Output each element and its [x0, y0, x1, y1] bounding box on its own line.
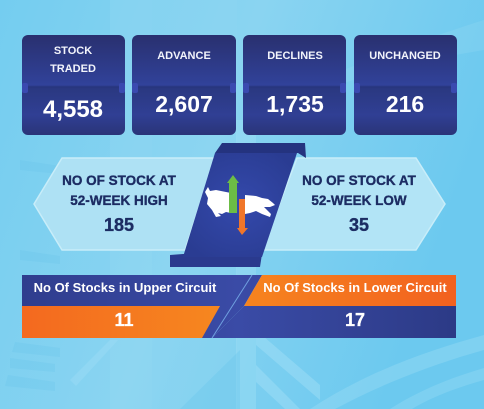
- card: declines: [243, 35, 346, 135]
- card: advance: 2,607: [155, 91, 213, 117]
- icon: green up arrow: [227, 175, 239, 213]
- icon: orange down arrow: [237, 199, 248, 235]
- panel: 52-week high: 52-WEEK HIGH: [70, 193, 168, 208]
- panel: 52-week low: [262, 158, 445, 250]
- panel: 52-week high: 185: [104, 215, 134, 235]
- panel: 52-week high: [34, 158, 215, 250]
- card: stock traded: [22, 35, 125, 135]
- panel: 52-week high: NO OF STOCK AT: [62, 173, 177, 188]
- panel: upper circuit: 11: [114, 310, 134, 330]
- panel: lower circuit: 17: [345, 310, 365, 330]
- icon: bear: [245, 195, 275, 217]
- card: declines: 1,735: [266, 91, 324, 117]
- card: unchanged: [354, 35, 457, 135]
- panel: 52-week low: NO OF STOCK AT: [302, 173, 417, 188]
- card: unchanged: 216: [386, 91, 424, 117]
- ribbon: [170, 143, 306, 267]
- card: unchanged: UNCHANGED: [369, 50, 441, 62]
- panel: 52-week low: 35: [349, 215, 369, 235]
- panel: lower circuit: No Of Stocks in Lower Circuit: [263, 280, 447, 295]
- divider line: [212, 275, 252, 338]
- card: stock traded: 4,558: [43, 96, 103, 123]
- card: declines: DECLINES: [267, 50, 323, 62]
- panel: upper circuit: [22, 275, 262, 338]
- panel: lower circuit: [212, 275, 456, 338]
- panel: upper circuit: No Of Stocks in Upper Circuit: [34, 280, 217, 295]
- card: advance: ADVANCE: [157, 50, 211, 62]
- panel: 52-week low: 52-WEEK LOW: [311, 193, 407, 208]
- card: stock traded: STOCK: [54, 45, 92, 57]
- icon: bull: [205, 187, 231, 217]
- card: stock traded: TRADED: [50, 63, 96, 75]
- card: advance: [132, 35, 236, 135]
